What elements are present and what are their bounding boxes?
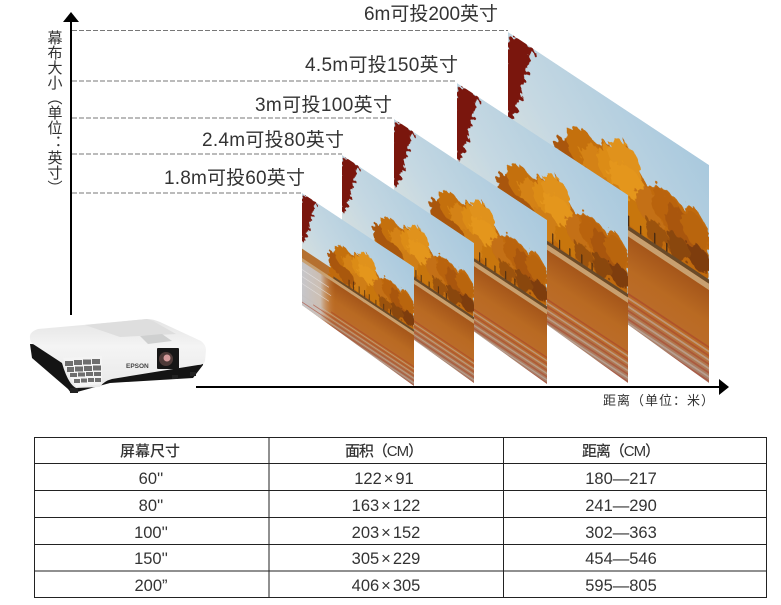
- table row 60: 60'': [139, 470, 163, 488]
- table header: 面积（CM）: [345, 443, 423, 460]
- table header: 屏幕尺寸: [120, 443, 180, 460]
- projector brand: EPSON: [126, 363, 149, 370]
- table row 150: 305×229: [352, 550, 420, 568]
- projector top panel: [85, 319, 176, 337]
- size labels: 2.4m可投80英寸: [202, 129, 344, 151]
- table: [34, 438, 766, 598]
- size labels: [164, 3, 498, 189]
- table row 150: 454—546: [585, 550, 657, 568]
- vertical axis arrow: [63, 12, 79, 315]
- screen: 100 inch: [391, 117, 549, 387]
- table row 100: [134, 524, 657, 542]
- table row 150: 150'': [134, 550, 168, 568]
- icon: projector: [30, 319, 206, 393]
- size labels: 1.8m可投60英寸: [164, 167, 305, 189]
- table row 150: [134, 550, 657, 568]
- table row 80: 241—290: [585, 497, 657, 515]
- table row 200: 595—805: [585, 577, 657, 595]
- horizontal axis arrow: [196, 379, 729, 395]
- y axis label: 幕布大小（单位：英寸）: [46, 30, 62, 195]
- projector feet: [70, 372, 196, 393]
- projector lens: [157, 348, 179, 369]
- screen: 200 inch: [504, 29, 711, 387]
- table row 200: [134, 577, 657, 595]
- table header: [120, 443, 660, 460]
- table row 100: 100'': [134, 524, 168, 542]
- projector vent: [63, 356, 102, 387]
- table row 80: 80'': [139, 497, 163, 515]
- table row 80: 163×122: [352, 497, 420, 515]
- table row 100: 302—363: [585, 524, 657, 542]
- x axis label: 距离（单位：米）: [603, 393, 714, 408]
- size labels: 4.5m可投150英寸: [305, 54, 458, 76]
- table row 60: [139, 470, 657, 488]
- projector body: [30, 319, 206, 388]
- screen: 80 inch: [339, 153, 475, 386]
- table row 100: 203×152: [352, 524, 420, 542]
- table row 60: 180—217: [585, 470, 657, 488]
- screen: 60 inch: [300, 192, 415, 388]
- table row 80: [139, 497, 657, 515]
- size labels: 3m可投100英寸: [255, 94, 392, 116]
- table row 60: 122×91: [354, 470, 414, 488]
- table row 200: 200”: [134, 577, 168, 595]
- screen: 150 inch: [454, 81, 630, 386]
- size labels: 6m可投200英寸: [364, 3, 498, 25]
- table row 200: 406×305: [352, 577, 420, 595]
- table grid: [34, 438, 766, 598]
- table header: 距离（CM）: [582, 443, 660, 460]
- dashed guide lines: [72, 30, 508, 193]
- projector underside: [30, 344, 204, 393]
